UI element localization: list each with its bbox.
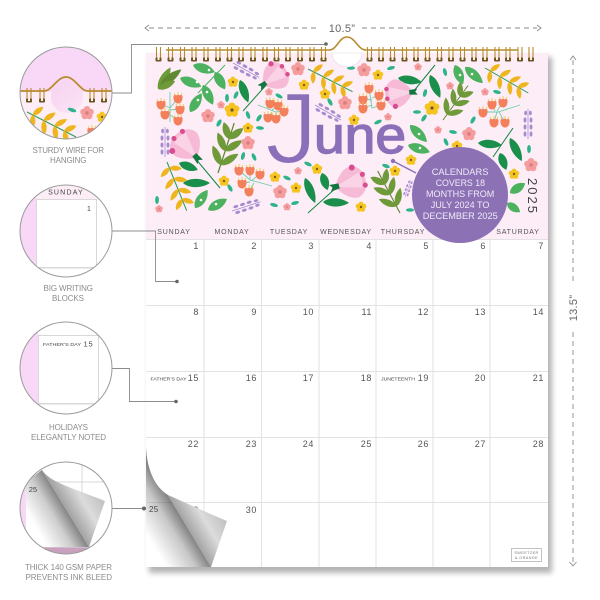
caption: writing blocks: BIG WRITING [44, 284, 93, 293]
dates: 29 [188, 505, 199, 515]
floral header panel [146, 53, 548, 240]
purple badge: COVERS 18 [436, 177, 485, 188]
caption: sturdy wire: STURDY WIRE FOR [32, 146, 104, 155]
weekday headings: TUESDAY [270, 229, 308, 236]
height dimension arrow: 13.5” [568, 295, 580, 321]
dates: 1 [193, 241, 199, 251]
caption: holidays [31, 423, 106, 442]
botanical illustrations [155, 56, 538, 220]
purple badge: MONTHS FROM [426, 188, 494, 199]
year label: 2025 [525, 178, 540, 215]
detail circle: thick paper [20, 462, 112, 556]
detail circle: holidays: FATHER’S DAY [43, 342, 82, 348]
height dimension arrow [568, 56, 580, 566]
June month title [265, 73, 406, 185]
dates: 18 [361, 373, 372, 383]
purple badge: DECEMBER 2025 [423, 210, 498, 221]
detail circle: writing blocks: 1 [87, 206, 91, 213]
dates: 20 [475, 373, 486, 383]
calendar [146, 37, 552, 573]
dates: 15 [188, 373, 199, 383]
spiral wire binding [156, 37, 534, 62]
dates: 5 [423, 241, 429, 251]
holiday labels: FATHER’S DAY [150, 376, 187, 382]
dates: 24 [303, 439, 314, 449]
dates: 8 [193, 307, 199, 317]
callout line: holidays [112, 368, 178, 403]
dates: 22 [188, 439, 199, 449]
dates: 2 [251, 241, 257, 251]
detail circle: thick paper: 25 [29, 485, 37, 494]
caption: writing blocks: BLOCKS [52, 294, 84, 303]
brand logo: & ORANGE [515, 556, 538, 560]
dates: 14 [533, 307, 544, 317]
weekday headings: MONDAY [214, 229, 250, 236]
caption: thick paper [25, 563, 112, 582]
dates: 6 [480, 241, 486, 251]
detail circle: writing blocks: SUNDAY [48, 190, 84, 196]
dates: 27 [475, 439, 486, 449]
dates: 9 [251, 307, 257, 317]
dates [188, 241, 544, 515]
dates: 28 [533, 439, 544, 449]
dates: 25 [361, 439, 372, 449]
dates: 26 [418, 439, 429, 449]
date grid [146, 240, 548, 567]
detail circle: sturdy wire [20, 47, 112, 149]
dates: 19 [418, 373, 429, 383]
caption: thick paper: THICK 140 GSM PAPER [25, 563, 112, 572]
callout line: paper [112, 506, 146, 510]
purple badge [412, 147, 508, 243]
purple badge: JULY 2024 TO [431, 199, 489, 210]
caption: sturdy wire: HANGING [50, 156, 86, 165]
caption: thick paper: PREVENTS INK BLEED [26, 573, 112, 582]
dates: 3 [308, 241, 314, 251]
page curl [146, 447, 227, 567]
dates: 12 [418, 307, 429, 317]
June month title: J [265, 73, 318, 185]
width dimension arrow: 10.5” [329, 23, 355, 35]
holiday labels [150, 376, 415, 382]
detail circle: holidays [20, 322, 112, 414]
caption: holidays: ELEGANTLY NOTED [31, 433, 106, 442]
callout line: writing blocks [112, 231, 179, 283]
brand logo [512, 548, 542, 562]
holiday labels: JUNETEENTH [381, 376, 415, 382]
brand logo: SWEETZER [514, 551, 539, 555]
callout line: wire [112, 42, 328, 93]
detail circle: holidays: 15 [84, 340, 93, 348]
dates: 11 [361, 307, 372, 317]
dates: 30 [246, 505, 257, 515]
dates: 16 [246, 373, 257, 383]
caption: sturdy wire [32, 146, 104, 165]
weekday headings [157, 229, 540, 236]
dates: 21 [533, 373, 544, 383]
June month title: une [314, 107, 406, 165]
detail circle: writing blocks [20, 185, 112, 277]
dates: 17 [303, 373, 314, 383]
dates: 4 [366, 241, 372, 251]
caption: writing blocks [44, 284, 93, 303]
weekday headings: THURSDAY [381, 229, 425, 236]
hanging hole [332, 53, 362, 67]
caption: holidays: HOLIDAYS [49, 423, 88, 432]
weekday headings: WEDNESDAY [320, 229, 372, 236]
purple badge: CALENDARS [432, 166, 488, 177]
page curl: 25 [149, 505, 159, 514]
dates: 7 [538, 241, 544, 251]
dates: 10 [303, 307, 314, 317]
width dimension arrow [145, 23, 541, 35]
weekday headings: SUNDAY [157, 229, 191, 236]
weekday headings: SATURDAY [496, 229, 540, 236]
dates: 13 [475, 307, 486, 317]
dates: 23 [246, 439, 257, 449]
